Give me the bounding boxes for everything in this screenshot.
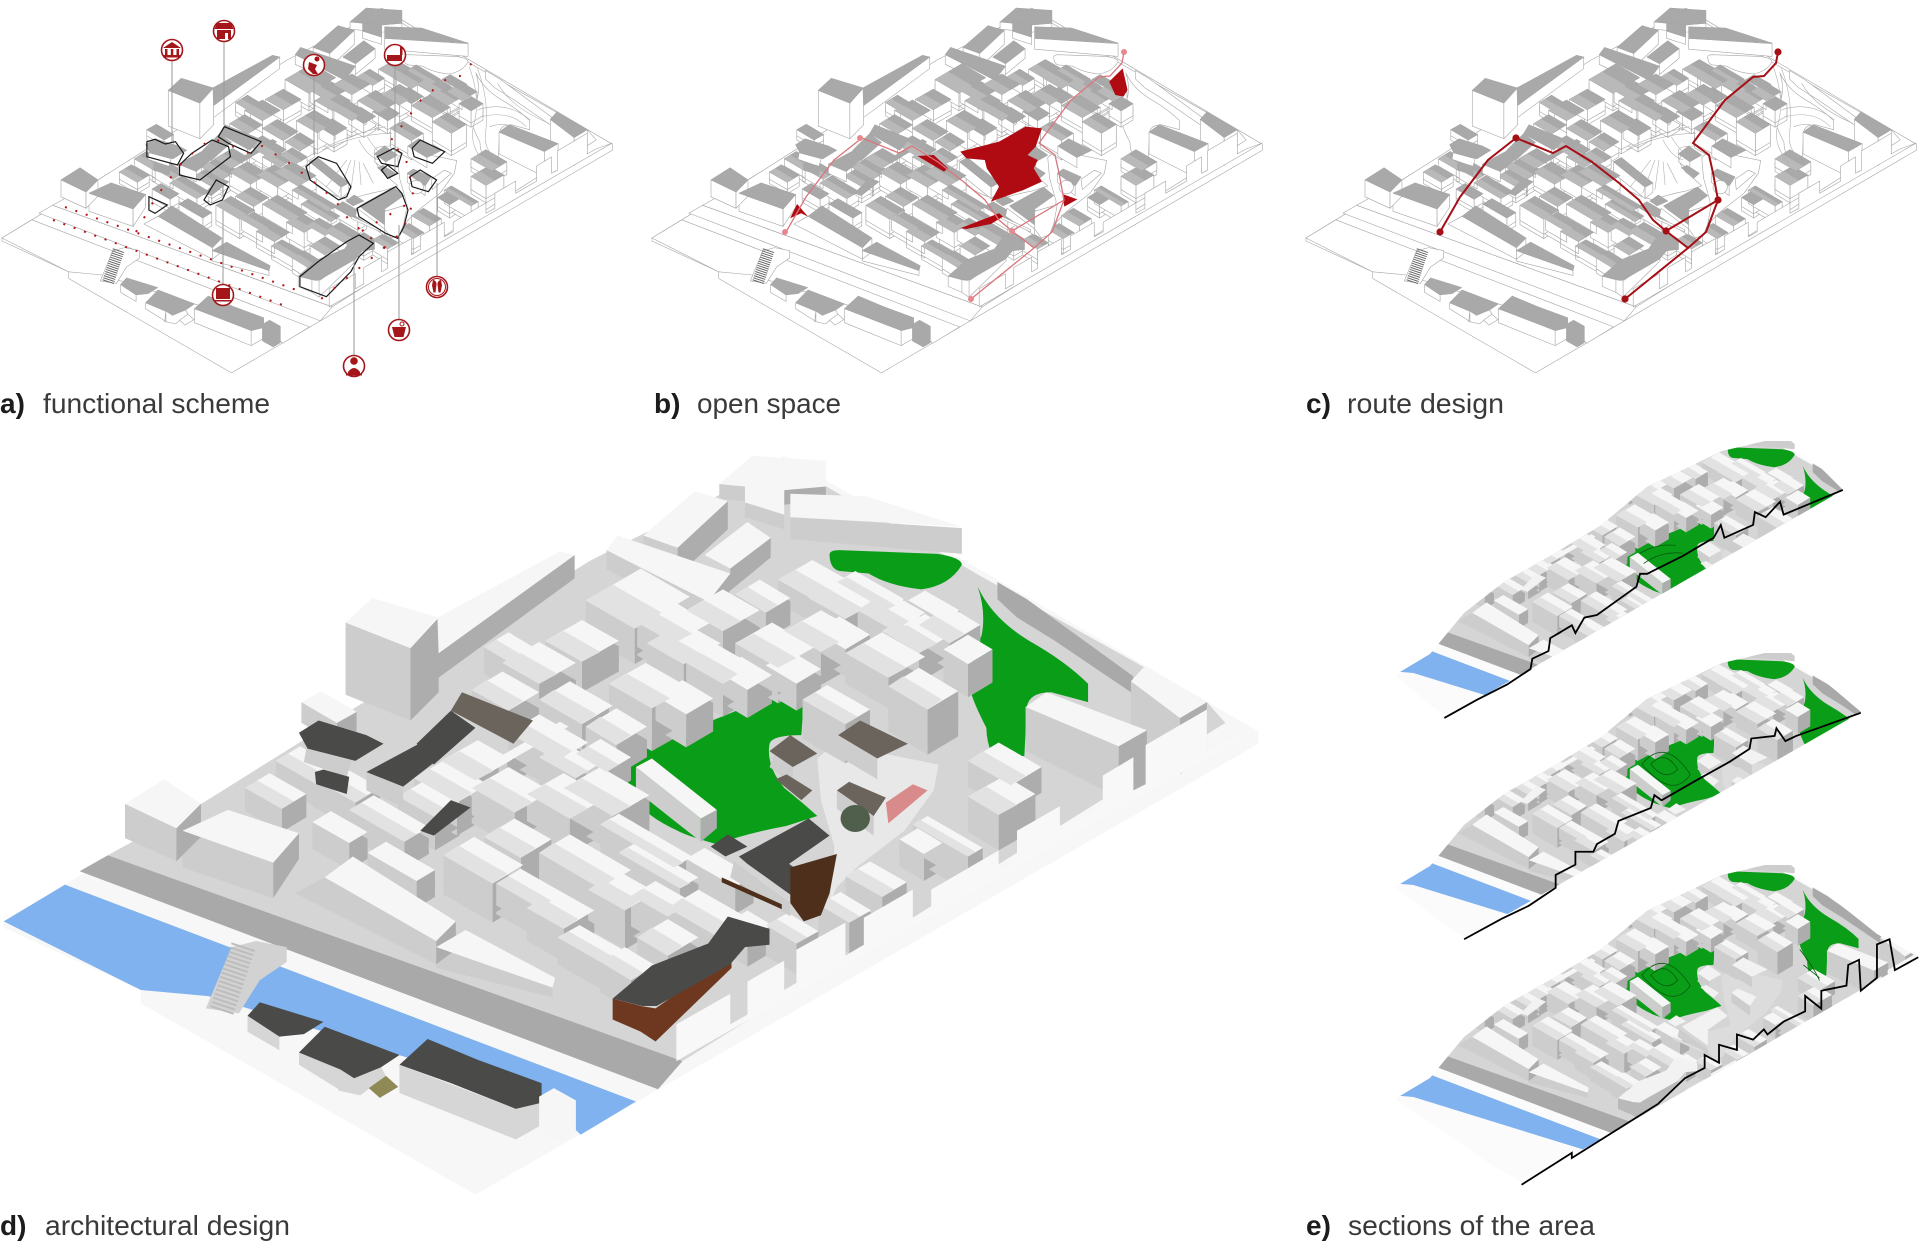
panel: e sections of the area [1306, 400, 1920, 1241]
icon: bust [344, 356, 364, 376]
icon: shop [214, 20, 234, 42]
leader lines [172, 41, 437, 356]
icon: cup [388, 320, 410, 340]
terrain contours a [322, 67, 549, 193]
label c: route design [1347, 388, 1504, 419]
label c: c) [1306, 388, 1331, 419]
icon: utensils [426, 276, 448, 298]
pink nodes [782, 49, 1127, 302]
green hill contours [1640, 545, 1820, 996]
label a: functional scheme [43, 388, 270, 419]
terrain contours c [1626, 67, 1853, 193]
icon: person [304, 54, 324, 76]
route lines [1440, 52, 1778, 299]
route nodes [1436, 48, 1782, 303]
pink paths [786, 52, 1124, 299]
highlighted buildings [147, 127, 445, 297]
label e: e) [1306, 1210, 1331, 1241]
section 1 cut line [1444, 490, 1843, 718]
massing plan c [1306, 8, 1916, 373]
label b: open space [697, 388, 841, 419]
massing plan a [2, 8, 612, 373]
panel: a functional scheme [0, 8, 612, 419]
section 3 cut line [1522, 939, 1918, 1185]
panel: c route design [1306, 8, 1916, 419]
label b: b) [654, 388, 680, 419]
section 2 cut line [1464, 713, 1861, 939]
section 1 [1400, 441, 1843, 695]
panel: b open space [652, 8, 1262, 419]
icon: temple [162, 40, 182, 60]
red activity dots along streets [53, 52, 474, 307]
solid massing model [4, 456, 1258, 1195]
icon: book [212, 284, 234, 306]
label d: d) [0, 1210, 26, 1241]
section 3 [1400, 865, 1918, 1150]
section 2 [1400, 653, 1861, 914]
red open-space areas [790, 68, 1128, 229]
label a: a) [0, 388, 25, 419]
label e: sections of the area [1348, 1210, 1595, 1241]
massing plan b [652, 8, 1262, 373]
label d: architectural design [45, 1210, 290, 1241]
icon: factory [384, 44, 406, 66]
panel: d architectural design [0, 456, 1258, 1241]
